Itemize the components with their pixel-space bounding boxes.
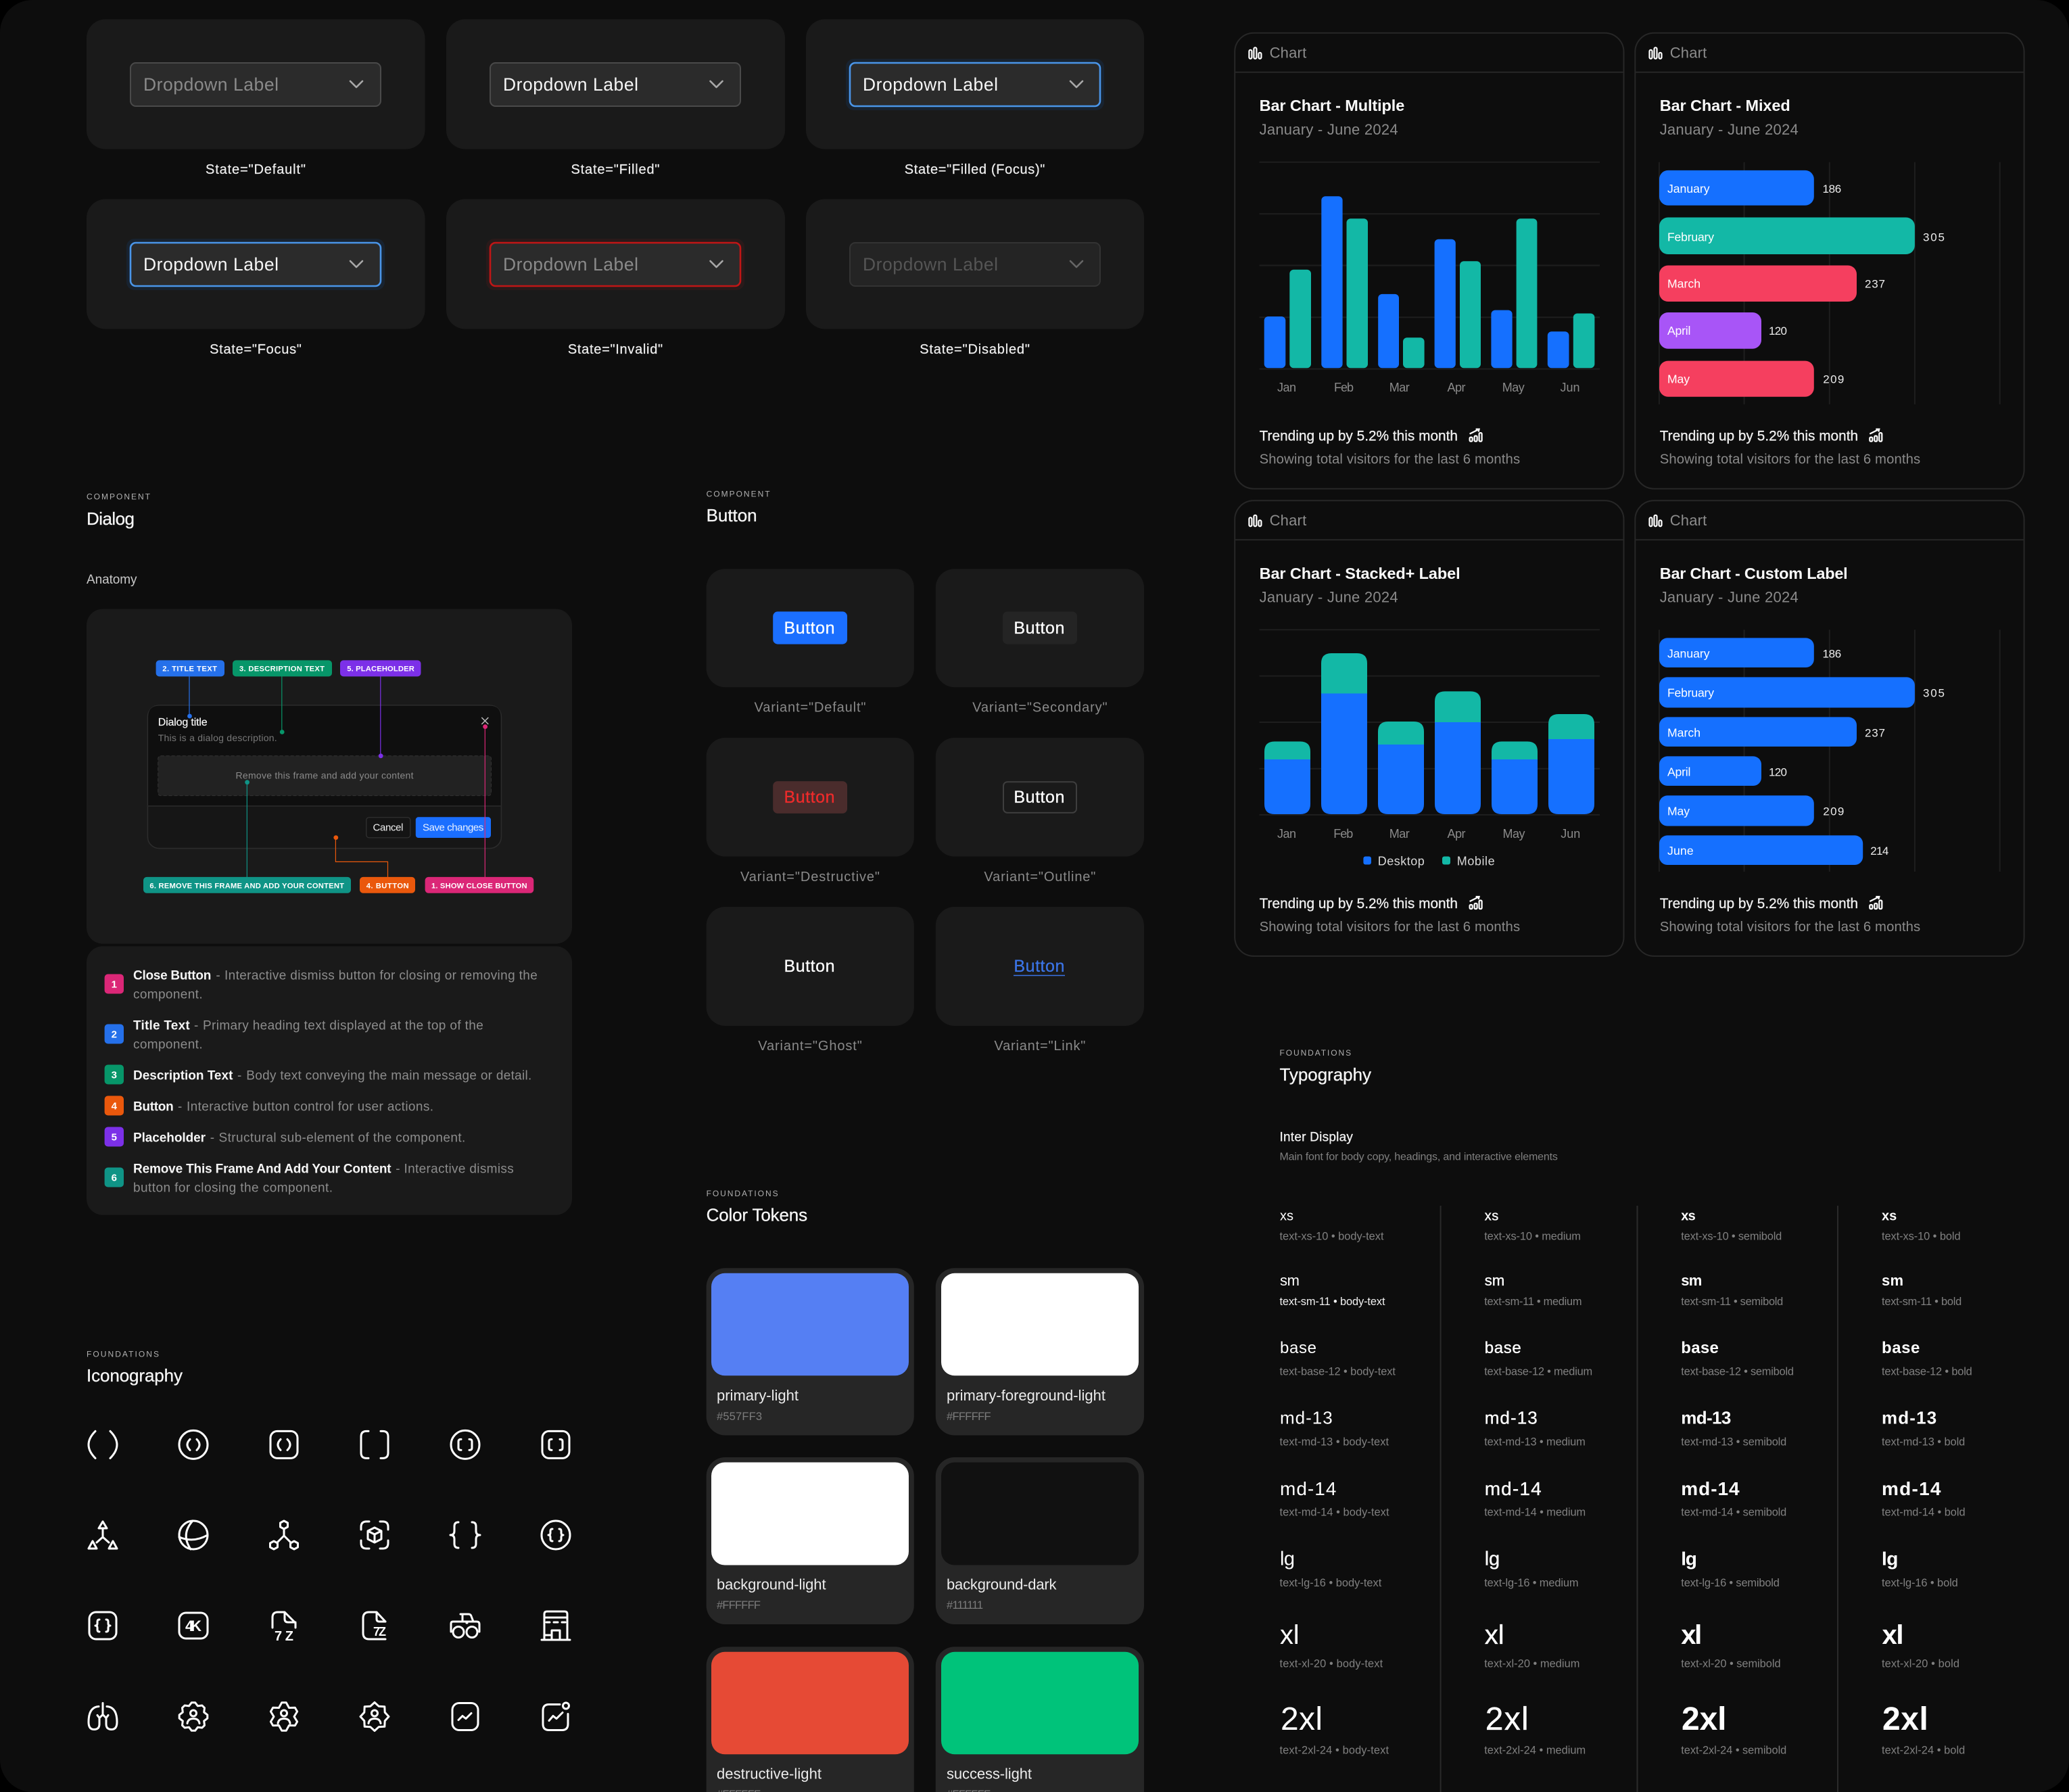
type column: body-text: base xyxy=(1280,1339,1316,1357)
panel: bar chart custom label: Trending up by 5.2% this month xyxy=(1660,896,1858,912)
type column: semibold: text-xl-20 • semibold xyxy=(1681,1658,1781,1670)
legend item 1 xyxy=(105,968,538,1002)
icon: 4K xyxy=(179,1613,208,1638)
legend item 4: Interactive button control for user actions. xyxy=(187,1100,433,1114)
horizontal bar chart blue: April xyxy=(1667,765,1690,779)
section: dialog heading: Dialog xyxy=(87,509,135,529)
color token: primary-foreground-light xyxy=(936,1268,1144,1435)
section: iconography heading: FOUNDATIONS xyxy=(87,1350,159,1359)
dialog mock xyxy=(147,705,501,849)
type column: body-text xyxy=(1279,1208,1396,1757)
horizontal bar chart blue: 186 xyxy=(1823,648,1841,660)
horizontal bar chart blue xyxy=(1659,630,2000,872)
type column: body-text: xs xyxy=(1280,1208,1293,1223)
button card: secondary: Variant="Secondary" xyxy=(972,701,1108,715)
panel: bar chart mixed: January - June 2024 xyxy=(1660,121,1799,138)
legend item 2 xyxy=(105,1018,483,1052)
panel: bar chart stacked: Showing total visitors for the last 6 months xyxy=(1260,920,1520,935)
stacked bar chart: Feb xyxy=(1333,827,1353,841)
dropdown card: default xyxy=(87,19,425,177)
icon: chart notification xyxy=(543,1703,569,1730)
type column: medium: text-base-12 • medium xyxy=(1484,1366,1592,1378)
legend item 5: 5 xyxy=(112,1132,117,1143)
type column: bold: sm xyxy=(1882,1272,1903,1289)
type column: bold: text-2xl-24 • bold xyxy=(1882,1745,1965,1757)
type column: medium: text-xs-10 • medium xyxy=(1484,1231,1581,1243)
panel: bar chart custom label xyxy=(1635,500,2024,956)
horizontal bar chart xyxy=(1659,162,2000,404)
type column: medium: sm xyxy=(1485,1272,1504,1289)
typeface description: Main font for body copy, headings, and interactive elements xyxy=(1279,1152,1558,1163)
legend item 1: - xyxy=(216,968,220,983)
section: dropdown states xyxy=(87,19,1144,357)
section: typography heading: FOUNDATIONS xyxy=(1279,1048,1351,1058)
type column: body-text: text-2xl-24 • body-text xyxy=(1279,1745,1389,1757)
type scale column dividers xyxy=(1441,1206,1838,1792)
panel: bar chart mixed: Bar Chart - Mixed xyxy=(1660,97,1790,114)
chart legend: Mobile xyxy=(1457,855,1495,868)
panel: bar chart custom label: Chart xyxy=(1670,512,1707,529)
legend item 2: Title Text xyxy=(133,1018,190,1033)
type column: medium: base xyxy=(1485,1339,1521,1357)
dropdown card: focus xyxy=(87,199,425,357)
button card: secondary: Button xyxy=(1014,619,1064,638)
type column: bold: text-xs-10 • bold xyxy=(1882,1231,1961,1243)
type column: medium: text-lg-16 • medium xyxy=(1484,1577,1578,1589)
type column: semibold: md-14 xyxy=(1681,1478,1740,1499)
horizontal bar chart blue: 214 xyxy=(1870,845,1888,857)
color token: primary-foreground-light: #FFFFFF xyxy=(947,1411,991,1423)
legend item 4: Button xyxy=(133,1100,174,1114)
type column: bold: text-base-12 • bold xyxy=(1882,1366,1972,1378)
typeface description: Inter Display xyxy=(1279,1131,1353,1145)
dialog mock: This is a dialog description. xyxy=(158,732,277,743)
legend item 4 xyxy=(105,1095,433,1116)
type column: bold: 2xl xyxy=(1882,1701,1928,1737)
section: button heading: Button xyxy=(707,505,757,525)
grouped bar chart: May xyxy=(1502,381,1525,394)
type column: bold: text-md-14 • bold xyxy=(1882,1507,1966,1519)
dropdown card: invalid xyxy=(446,199,785,357)
button card: secondary xyxy=(936,569,1144,715)
type column: bold: text-md-13 • bold xyxy=(1882,1436,1965,1448)
stacked bar chart: Jun xyxy=(1561,827,1580,841)
horizontal bar chart: 186 xyxy=(1823,183,1841,195)
chart legend: Desktop xyxy=(1378,855,1425,868)
section: typography heading: Typography xyxy=(1279,1064,1371,1085)
type column: bold xyxy=(1882,1208,1972,1757)
type column: bold: md-14 xyxy=(1882,1478,1941,1499)
dropdown card: default: Dropdown Label xyxy=(143,74,279,95)
horizontal bar chart: March xyxy=(1667,277,1701,291)
button card: destructive: Variant="Destructive" xyxy=(740,870,880,885)
legend item 1: Interactive dismiss button for closing or removing the xyxy=(224,968,538,983)
type column: body-text: text-xl-20 • body-text xyxy=(1279,1658,1383,1670)
type column: body-text: text-xs-10 • body-text xyxy=(1279,1231,1384,1243)
type column: bold: xs xyxy=(1882,1208,1897,1223)
horizontal bar chart: April xyxy=(1667,324,1690,337)
type column: semibold: xs xyxy=(1681,1208,1696,1223)
type column: body-text: text-md-14 • body-text xyxy=(1279,1507,1389,1519)
icon: brackets xyxy=(361,1431,388,1458)
dropdown card: default: State="Default" xyxy=(206,162,306,177)
horizontal bar chart: May xyxy=(1667,372,1690,385)
panel: bar chart multiple: January - June 2024 xyxy=(1260,121,1398,138)
icon: trending xyxy=(1870,897,1882,909)
typeface description xyxy=(1279,1131,1558,1163)
type column: semibold xyxy=(1681,1208,1794,1757)
icon: 4K: 4K xyxy=(185,1618,201,1634)
icon: triangle network xyxy=(89,1522,117,1549)
button card: default: Variant="Default" xyxy=(755,701,865,715)
dropdown card: focus: State="Focus" xyxy=(210,342,302,357)
callout: remove frame xyxy=(143,780,351,893)
callout: remove frame: 6. REMOVE THIS FRAME AND ADD YOUR CONTENT xyxy=(149,882,344,890)
button card: destructive: Button xyxy=(784,788,834,807)
panel: anatomy legend xyxy=(87,946,572,1215)
type column: medium: md-13 xyxy=(1485,1408,1538,1428)
section: iconography heading xyxy=(87,1350,183,1386)
horizontal bar chart blue: 237 xyxy=(1865,726,1885,740)
dialog mock: Remove this frame and add your content xyxy=(235,770,414,780)
anatomy label: Anatomy xyxy=(87,573,137,587)
type column: medium: text-2xl-24 • medium xyxy=(1484,1745,1586,1757)
panel: bar chart custom label: Showing total visitors for the last 6 months xyxy=(1660,920,1920,935)
stacked bar chart: Mar xyxy=(1389,827,1410,841)
button card: outline: Button xyxy=(1014,788,1064,807)
section: typography heading xyxy=(1279,1048,1371,1085)
horizontal bar chart blue: February xyxy=(1667,686,1714,699)
callout: close button: 1. SHOW CLOSE BUTTON xyxy=(431,882,527,890)
legend item 3 xyxy=(105,1064,531,1085)
stacked bar chart: May xyxy=(1502,827,1525,841)
icon: user gear wide xyxy=(179,1703,208,1730)
horizontal bar chart: 237 xyxy=(1865,277,1885,291)
color token: background-dark xyxy=(936,1457,1144,1624)
legend item 1: component. xyxy=(133,987,203,1002)
section: dialog heading xyxy=(87,492,151,529)
dropdown card: filled focus xyxy=(806,19,1144,177)
type column: medium: text-md-13 • medium xyxy=(1484,1436,1586,1448)
panel: bar chart stacked: Chart xyxy=(1270,512,1306,529)
section: color tokens heading: FOUNDATIONS xyxy=(707,1189,778,1198)
type column: body-text: md-13 xyxy=(1280,1408,1333,1428)
panel: bar chart mixed xyxy=(1635,33,2024,489)
icon: lungs xyxy=(89,1703,117,1730)
section: button heading xyxy=(707,490,770,525)
type column: body-text: text-sm-11 • body-text xyxy=(1279,1296,1385,1308)
dropdown card: filled focus: Dropdown Label xyxy=(863,74,998,95)
section: color tokens heading: Color Tokens xyxy=(707,1205,807,1225)
legend item 6: - xyxy=(396,1162,400,1177)
callout: placeholder: 5. PLACEHOLDER xyxy=(347,665,414,674)
horizontal bar chart blue: January xyxy=(1667,646,1710,660)
type column: semibold: base xyxy=(1681,1339,1719,1357)
legend item 5: Placeholder xyxy=(133,1131,206,1146)
button card: default: Button xyxy=(784,619,834,638)
legend item 6: button for closing the component. xyxy=(133,1181,333,1196)
type column: semibold: text-md-13 • semibold xyxy=(1681,1436,1786,1448)
grouped bar chart: Feb xyxy=(1334,381,1354,394)
section: button heading: COMPONENT xyxy=(707,490,770,499)
type column: semibold: text-lg-16 • semibold xyxy=(1681,1577,1780,1589)
icon: 7z file top xyxy=(272,1612,295,1644)
callout: close button xyxy=(425,724,533,893)
icon: shop xyxy=(542,1611,570,1640)
type column: body-text: xl xyxy=(1280,1620,1300,1650)
dropdown card: invalid: Dropdown Label xyxy=(503,254,638,275)
icon: tractor xyxy=(451,1614,479,1638)
callout: description text: 3. DESCRIPTION TEXT xyxy=(239,665,325,674)
color token: background-light: background-light xyxy=(717,1576,826,1593)
legend item 6: Interactive dismiss xyxy=(404,1162,514,1177)
legend item 5: Structural sub-element of the component. xyxy=(219,1131,465,1146)
icon: square brackets xyxy=(542,1431,569,1458)
panel: dialog anatomy xyxy=(87,609,572,944)
icon: chart square xyxy=(452,1703,478,1730)
color token: primary-light: #557FF3 xyxy=(717,1411,762,1423)
legend item 3: 3 xyxy=(112,1070,117,1081)
type column: body-text: sm xyxy=(1280,1272,1300,1289)
icon: chart xyxy=(1650,515,1662,526)
dropdown card: filled focus: State="Filled (Focus)" xyxy=(905,162,1045,177)
grouped bar chart xyxy=(1260,162,1600,394)
legend item 5: - xyxy=(210,1131,214,1146)
legend item 3: - xyxy=(237,1068,241,1083)
horizontal bar chart blue: March xyxy=(1667,726,1701,740)
panel: bar chart stacked xyxy=(1235,500,1624,956)
icon grid xyxy=(89,1430,570,1731)
horizontal bar chart: 305 xyxy=(1923,231,1945,243)
legend item 4: 4 xyxy=(112,1101,118,1112)
callout: description text xyxy=(233,660,332,734)
type column: body-text: 2xl xyxy=(1281,1701,1323,1737)
icon: circle parentheses xyxy=(179,1430,208,1459)
button card: outline: Variant="Outline" xyxy=(984,870,1095,885)
color token: success-light xyxy=(936,1647,1144,1792)
button card: destructive xyxy=(707,738,914,885)
horizontal bar chart blue: June xyxy=(1667,844,1694,857)
callout: placeholder xyxy=(340,660,421,758)
type column: bold: lg xyxy=(1882,1549,1898,1570)
color token: primary-light: primary-light xyxy=(717,1387,799,1404)
type column: medium: xs xyxy=(1485,1208,1498,1223)
horizontal bar chart blue: May xyxy=(1667,805,1690,818)
icon: cube scan xyxy=(361,1522,388,1549)
icon: user gear xyxy=(270,1703,298,1730)
color token: destructive-light xyxy=(707,1647,914,1792)
icon: 7z file top: 7 Z xyxy=(275,1629,293,1644)
button card: ghost: Button xyxy=(784,957,834,976)
button card: ghost: Variant="Ghost" xyxy=(758,1039,862,1054)
type column: bold: text-sm-11 • bold xyxy=(1882,1296,1961,1308)
callout: title text: 2. TITLE TEXT xyxy=(162,665,217,674)
color token: background-light xyxy=(707,1457,914,1624)
icon: trending xyxy=(1870,429,1882,442)
legend item 3: Description Text xyxy=(133,1068,233,1083)
button card: link: Button xyxy=(1014,957,1064,976)
legend item 2: 2 xyxy=(112,1029,117,1040)
dropdown card: disabled: State="Disabled" xyxy=(920,342,1030,357)
icon: chart xyxy=(1650,47,1662,59)
section: iconography heading: Iconography xyxy=(87,1365,183,1386)
panel: bar chart custom label: January - June 2024 xyxy=(1660,588,1799,605)
button card: default xyxy=(707,569,914,715)
horizontal bar chart: 209 xyxy=(1823,373,1844,385)
section: color tokens heading xyxy=(707,1189,807,1225)
dropdown card: disabled xyxy=(806,199,1144,357)
icon: parentheses xyxy=(89,1431,117,1458)
horizontal bar chart: January xyxy=(1667,182,1710,195)
horizontal bar chart blue: 209 xyxy=(1823,805,1844,818)
type column: bold: xl xyxy=(1882,1620,1904,1650)
horizontal bar chart blue: 120 xyxy=(1769,765,1787,779)
type column: medium: text-sm-11 • medium xyxy=(1484,1296,1582,1308)
horizontal bar chart blue: 305 xyxy=(1923,687,1945,699)
legend item 2: component. xyxy=(133,1037,203,1052)
legend item 6: Remove This Frame And Add Your Content xyxy=(133,1162,391,1177)
type column: medium: lg xyxy=(1485,1549,1500,1570)
grouped bar chart: Jun xyxy=(1561,381,1579,394)
dialog mock: Save changes xyxy=(423,822,483,833)
panel: bar chart multiple: Chart xyxy=(1270,45,1306,61)
panel: bar chart custom label: Bar Chart - Custom Label xyxy=(1660,565,1848,582)
dropdown card: filled xyxy=(446,19,785,177)
legend item 6: 6 xyxy=(112,1173,117,1183)
panel: bar chart stacked: Bar Chart - Stacked+ Label xyxy=(1260,565,1460,582)
callout: button xyxy=(333,835,415,893)
dropdown card: filled: Dropdown Label xyxy=(503,74,638,95)
type column: bold: md-13 xyxy=(1882,1408,1936,1428)
chart legend xyxy=(1363,855,1495,868)
legend item 5 xyxy=(105,1127,465,1147)
type column: semibold: xl xyxy=(1681,1620,1702,1650)
horizontal bar chart: February xyxy=(1667,230,1714,243)
stacked bar chart xyxy=(1260,630,1600,841)
type column: semibold: md-13 xyxy=(1681,1408,1731,1428)
color token: background-dark: #111111 xyxy=(947,1599,983,1611)
icon: 7z file inset: 7Z xyxy=(373,1625,386,1638)
icon: globe xyxy=(179,1521,208,1549)
type column: bold: text-lg-16 • bold xyxy=(1882,1577,1958,1589)
stacked bar chart: Jan xyxy=(1277,827,1296,841)
type column: semibold: sm xyxy=(1681,1272,1702,1289)
color token: background-light: #FFFFFF xyxy=(717,1599,761,1611)
legend item 2: - xyxy=(194,1018,198,1033)
type column: medium: xl xyxy=(1485,1620,1504,1650)
type column: body-text: text-lg-16 • body-text xyxy=(1279,1577,1382,1589)
button card: ghost xyxy=(707,907,914,1054)
icon: trending xyxy=(1470,897,1482,909)
button card: outline xyxy=(936,738,1144,885)
type column: body-text: text-base-12 • body-text xyxy=(1279,1366,1396,1378)
panel: bar chart stacked: January - June 2024 xyxy=(1260,588,1398,605)
type column: semibold: text-2xl-24 • semibold xyxy=(1681,1745,1786,1757)
section: dialog heading: COMPONENT xyxy=(87,492,151,502)
icon: circle braces xyxy=(542,1521,570,1549)
type column: semibold: text-xs-10 • semibold xyxy=(1681,1231,1782,1243)
panel: bar chart mixed: Trending up by 5.2% this month xyxy=(1660,428,1858,444)
icon: square braces xyxy=(89,1612,116,1639)
color token: destructive-light: destructive-light xyxy=(717,1765,822,1783)
legend item 6 xyxy=(105,1162,514,1196)
type column: medium: md-14 xyxy=(1485,1478,1542,1499)
type column: semibold: text-sm-11 • semibold xyxy=(1681,1296,1783,1308)
dialog mock: Cancel xyxy=(373,822,403,833)
icon: chart xyxy=(1249,515,1261,526)
type column: semibold: lg xyxy=(1681,1549,1697,1570)
grouped bar chart: Mar xyxy=(1389,381,1410,394)
type column: body-text: text-md-13 • body-text xyxy=(1279,1436,1389,1448)
icon: circle brackets xyxy=(451,1430,479,1459)
legend item 1: 1 xyxy=(112,979,117,990)
grouped bar chart: Apr xyxy=(1447,381,1466,394)
color token: primary-light xyxy=(707,1268,914,1435)
type column: medium: text-md-14 • medium xyxy=(1484,1507,1586,1519)
panel: bar chart multiple: Trending up by 5.2% this month xyxy=(1260,428,1458,444)
type column: semibold: text-md-14 • semibold xyxy=(1681,1507,1786,1519)
panel: bar chart mixed: Chart xyxy=(1670,45,1707,61)
panel: bar chart stacked: Trending up by 5.2% this month xyxy=(1260,896,1458,912)
dropdown card: filled: State="Filled" xyxy=(571,162,660,177)
dropdown card: invalid: State="Invalid" xyxy=(568,342,663,357)
panel: bar chart multiple xyxy=(1235,33,1624,489)
icon: chart xyxy=(1249,47,1261,59)
color token: primary-foreground-light: primary-foreground-light xyxy=(947,1387,1105,1404)
type column: medium xyxy=(1484,1208,1592,1757)
button card: link: Variant="Link" xyxy=(994,1039,1085,1054)
type column: medium: 2xl xyxy=(1485,1701,1529,1737)
icon: user badge xyxy=(360,1703,389,1731)
type column: semibold: text-base-12 • semibold xyxy=(1681,1366,1794,1378)
legend item 4: - xyxy=(178,1100,182,1114)
dialog mock: Dialog title xyxy=(158,717,208,728)
panel: bar chart multiple: Showing total visitors for the last 6 months xyxy=(1260,452,1520,467)
stacked bar chart: Apr xyxy=(1447,827,1466,841)
legend item 2: Primary heading text displayed at the top of the xyxy=(203,1018,483,1033)
type column: body-text: md-14 xyxy=(1280,1478,1336,1499)
color token: background-dark: background-dark xyxy=(947,1576,1057,1593)
icon: curly braces xyxy=(450,1522,480,1548)
color token: success-light: success-light xyxy=(947,1765,1032,1783)
dropdown card: disabled: Dropdown Label xyxy=(863,254,998,275)
legend item 1: Close Button xyxy=(133,968,211,983)
grouped bar chart: Jan xyxy=(1277,381,1296,394)
type column: body-text: lg xyxy=(1280,1549,1295,1570)
legend item 3: Body text conveying the main message or detail. xyxy=(246,1068,531,1083)
callout: button: 4. BUTTON xyxy=(366,882,409,890)
button card: link xyxy=(936,907,1144,1054)
type column: bold: base xyxy=(1882,1339,1920,1357)
type column: medium: text-xl-20 • medium xyxy=(1484,1658,1579,1670)
icon: trending xyxy=(1470,429,1482,442)
horizontal bar chart: 120 xyxy=(1769,325,1787,337)
icon: molecule xyxy=(270,1521,298,1549)
panel: bar chart multiple: Bar Chart - Multiple xyxy=(1260,97,1404,114)
type column: semibold: 2xl xyxy=(1682,1701,1727,1737)
type column: bold: text-xl-20 • bold xyxy=(1882,1658,1959,1670)
callout: title text xyxy=(156,660,224,718)
dropdown card: focus: Dropdown Label xyxy=(143,254,279,275)
icon: 7z file inset xyxy=(363,1612,386,1639)
icon: square parentheses xyxy=(270,1431,298,1458)
panel: bar chart mixed: Showing total visitors for the last 6 months xyxy=(1660,452,1920,467)
